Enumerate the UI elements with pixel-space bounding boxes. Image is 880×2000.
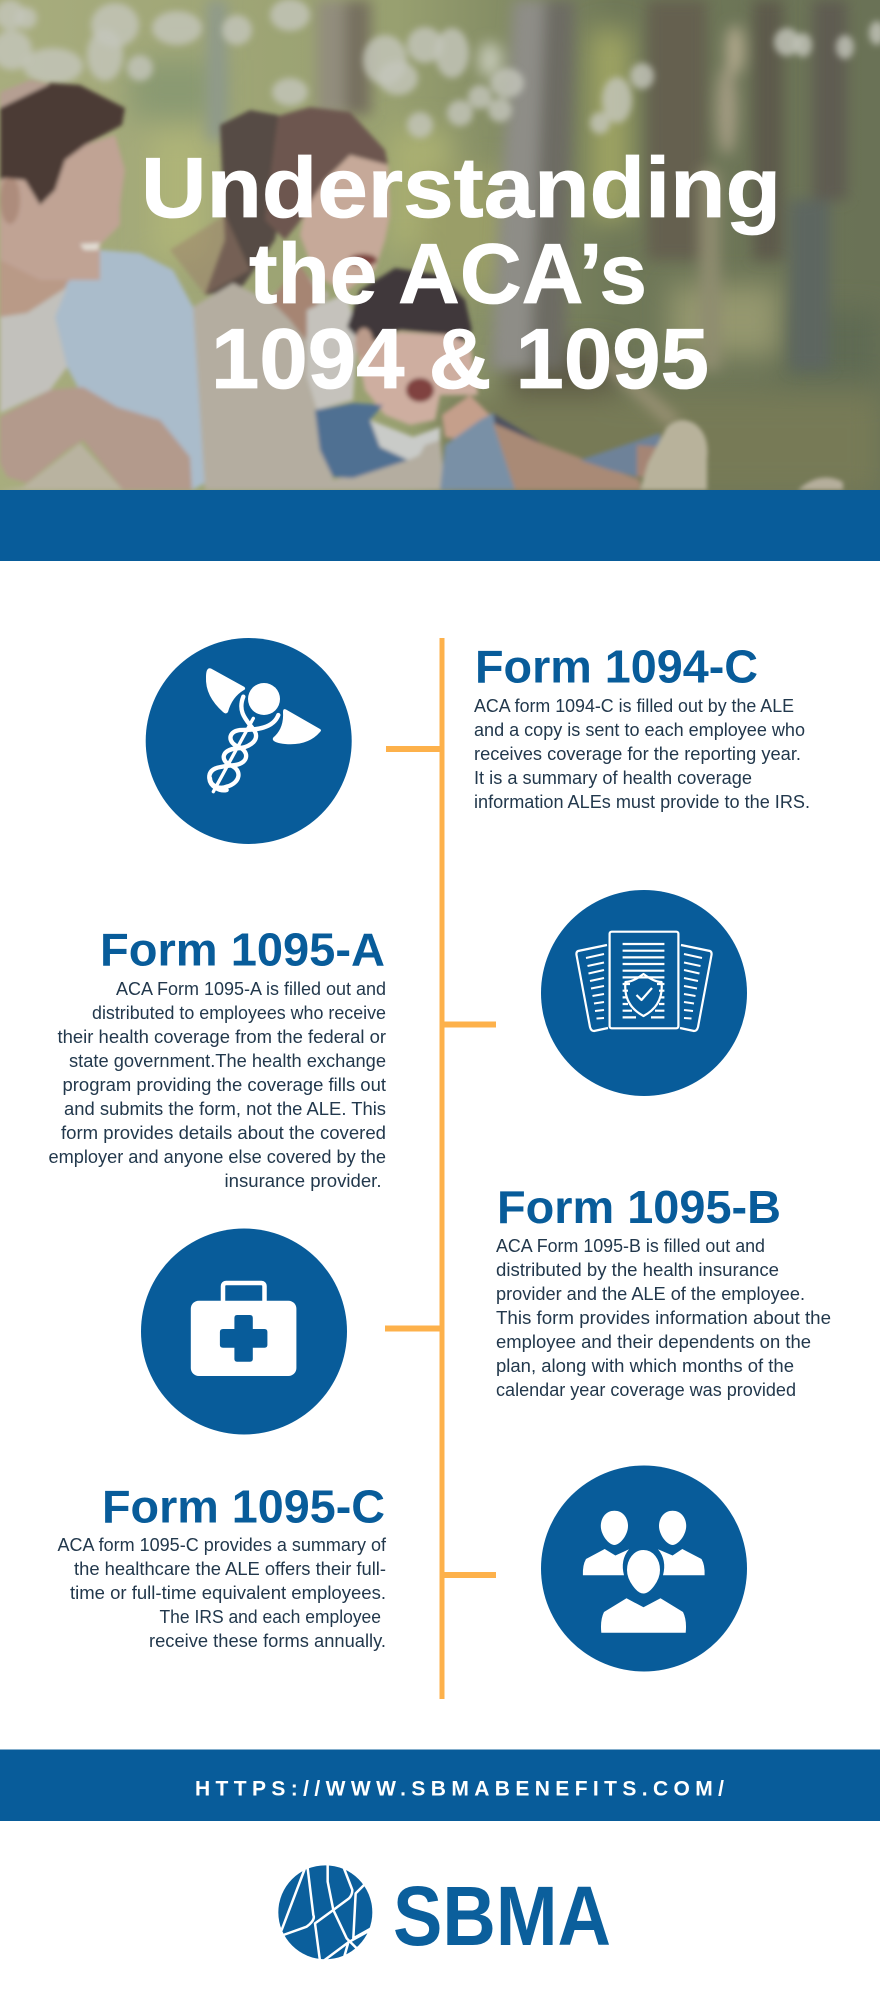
timeline spine bbox=[440, 638, 444, 1699]
connector: 1094-C bbox=[386, 746, 440, 752]
text block: Form 1095-B: calendar year coverage was provided bbox=[496, 1380, 796, 1400]
text block: Form 1095-A: Form 1095-A bbox=[100, 924, 385, 976]
text block: Form 1095-A: ACA Form 1095-A is filled out and bbox=[116, 979, 386, 999]
title: 1094 & 1095 bbox=[211, 312, 709, 407]
text block: Form 1095-A: employer and anyone else covered by the bbox=[48, 1147, 386, 1167]
text block: Form 1095-B: provider and the ALE of the employee. bbox=[496, 1284, 805, 1304]
text block: Form 1094-C: It is a summary of health coverage bbox=[474, 768, 752, 788]
text block: Form 1094-C bbox=[474, 640, 810, 812]
text block: Form 1094-C: Form 1094-C bbox=[475, 640, 758, 692]
text block: Form 1095-C: The IRS and each employee bbox=[160, 1607, 381, 1627]
text block: Form 1095-C bbox=[58, 1480, 387, 1651]
connector: 1095-B bbox=[385, 1326, 440, 1332]
connector: 1095-C bbox=[444, 1572, 496, 1578]
text block: Form 1095-B: Form 1095-B bbox=[497, 1181, 781, 1233]
text block: Form 1095-C: ACA form 1095-C provides a summary of bbox=[58, 1535, 387, 1555]
text block: Form 1095-B bbox=[496, 1181, 831, 1400]
text block: Form 1094-C: receives coverage for the reporting year. bbox=[474, 744, 801, 764]
text block: Form 1095-C: receive these forms annually. bbox=[149, 1631, 386, 1651]
text block: Form 1094-C: ACA form 1094-C is filled out by the ALE bbox=[474, 696, 794, 716]
family figures bbox=[0, 80, 843, 490]
title: Understanding bbox=[141, 141, 781, 236]
text block: Form 1095-A: insurance provider. bbox=[224, 1171, 382, 1191]
icon: documents with shield bbox=[541, 890, 747, 1096]
top blue band bbox=[0, 490, 880, 561]
bokeh highlights bbox=[0, 0, 880, 138]
icon: first aid kit bbox=[141, 1228, 347, 1434]
title: the ACA’s bbox=[249, 227, 647, 322]
text block: Form 1095-A: program providing the coverage fills out bbox=[62, 1075, 386, 1095]
text block: Form 1095-A: form provides details about the covered bbox=[61, 1123, 386, 1143]
text block: Form 1095-B: employee and their dependents on the bbox=[496, 1332, 811, 1352]
hero photo: family in a park bbox=[0, 0, 880, 495]
connector: 1095-A bbox=[444, 1022, 496, 1028]
text block: Form 1094-C: information ALEs must provide to the IRS. bbox=[474, 792, 810, 812]
text block: Form 1095-A: and submits the form, not the ALE. This bbox=[64, 1099, 386, 1119]
text block: Form 1095-B: This form provides information about the bbox=[496, 1308, 831, 1328]
text block: Form 1095-A: distributed to employees who receive bbox=[92, 1003, 386, 1023]
text block: Form 1095-B: plan, along with which months of the bbox=[496, 1356, 794, 1376]
footer band with URL bbox=[0, 1750, 880, 1821]
text block: Form 1095-A: their health coverage from the federal or bbox=[58, 1027, 386, 1047]
text block: Form 1095-C: Form 1095-C bbox=[102, 1480, 385, 1532]
text block: Form 1095-A bbox=[48, 924, 386, 1191]
text block: Form 1095-A: state government.The health exchange bbox=[69, 1051, 386, 1071]
text block: Form 1095-C: the healthcare the ALE offers their full- bbox=[74, 1559, 386, 1579]
text block: Form 1094-C: and a copy is sent to each employee who bbox=[474, 720, 805, 740]
text block: Form 1095-B: ACA Form 1095-B is filled out and bbox=[496, 1236, 765, 1256]
text block: Form 1095-B: distributed by the health insurance bbox=[496, 1260, 779, 1280]
logo: SBMA: SBMA bbox=[393, 1869, 611, 1963]
icon: caduceus bbox=[146, 638, 352, 844]
logo: SBMA bbox=[278, 1863, 611, 1963]
text block: Form 1095-C: time or full-time equivalent employees. bbox=[70, 1583, 386, 1603]
icon: three people bbox=[541, 1466, 747, 1672]
footer band with URL: HTTPS://WWW.SBMABENEFITS.COM/ bbox=[195, 1778, 724, 1800]
logo globe bbox=[278, 1863, 372, 1961]
title bbox=[141, 141, 781, 407]
